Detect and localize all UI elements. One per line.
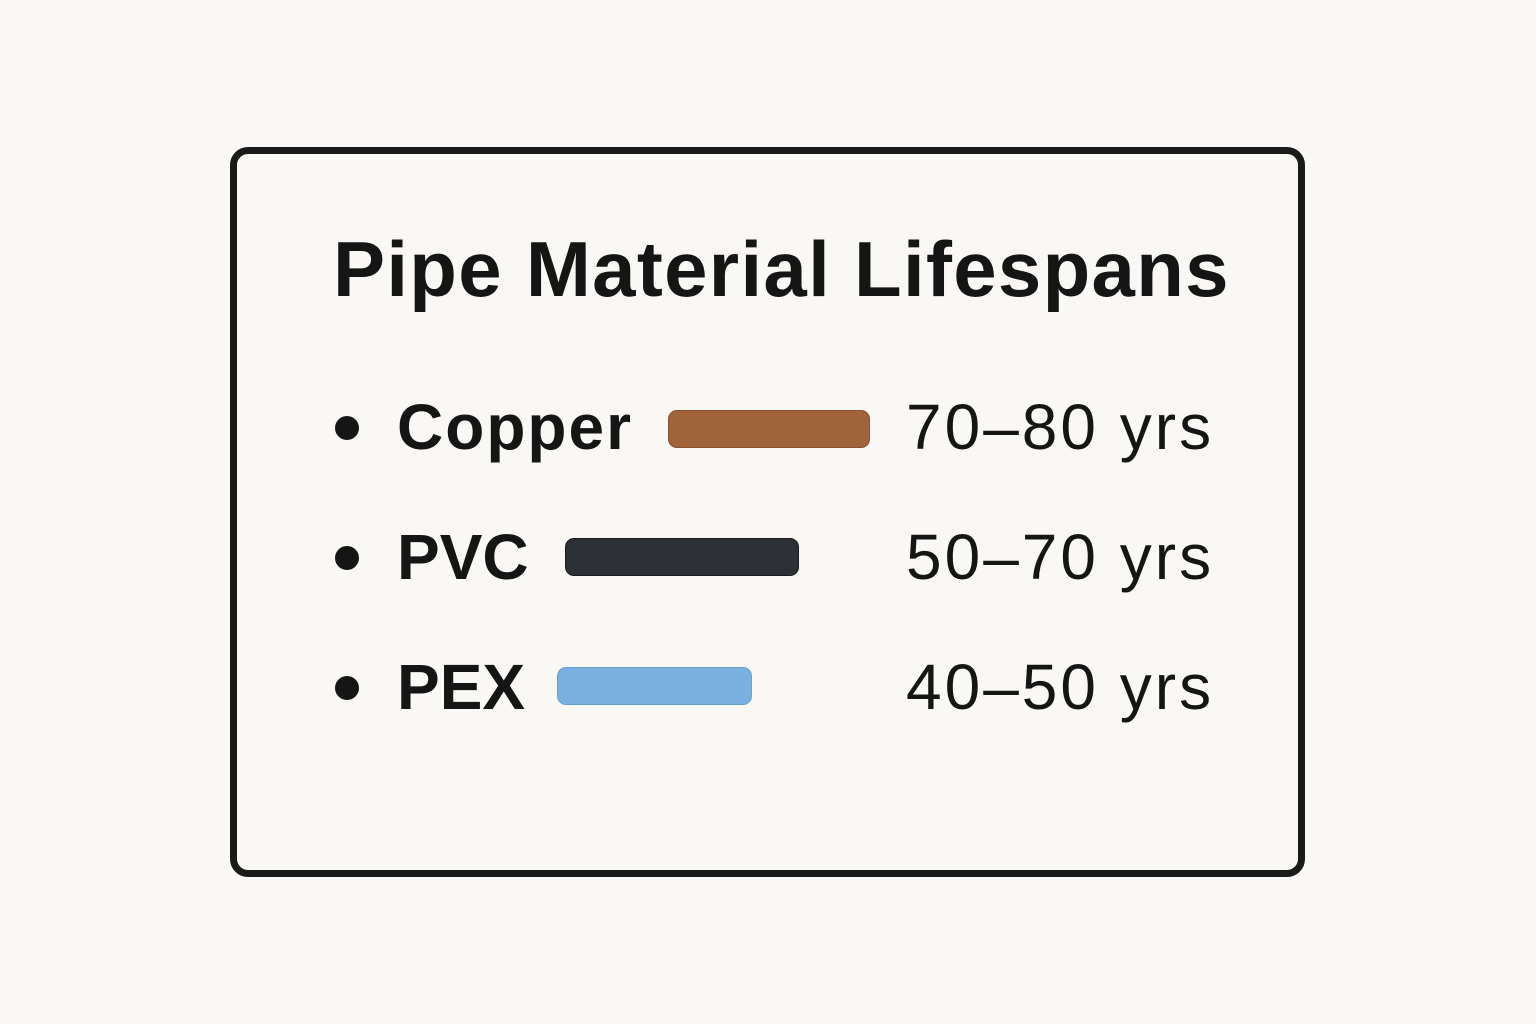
- value copper: 70–80 yrs: [906, 391, 1214, 463]
- value pex: 40–50 yrs: [906, 651, 1214, 723]
- bar copper: [668, 410, 870, 448]
- panel: card: [230, 147, 1305, 877]
- label copper: Copper: [397, 391, 633, 463]
- row: pex: [335, 651, 1214, 723]
- value pvc: 50–70 yrs: [906, 521, 1214, 593]
- label pvc: PVC: [397, 521, 529, 593]
- bar pvc: [565, 538, 799, 576]
- bar pex: [557, 667, 752, 705]
- title: Pipe Material Lifespans: [333, 225, 1230, 313]
- row: copper: [335, 391, 1214, 463]
- row: pvc: [335, 521, 1214, 593]
- label pex: PEX: [397, 651, 525, 723]
- bullet copper: [335, 416, 359, 440]
- bullet pvc: [335, 546, 359, 570]
- bullet pex: [335, 676, 359, 700]
